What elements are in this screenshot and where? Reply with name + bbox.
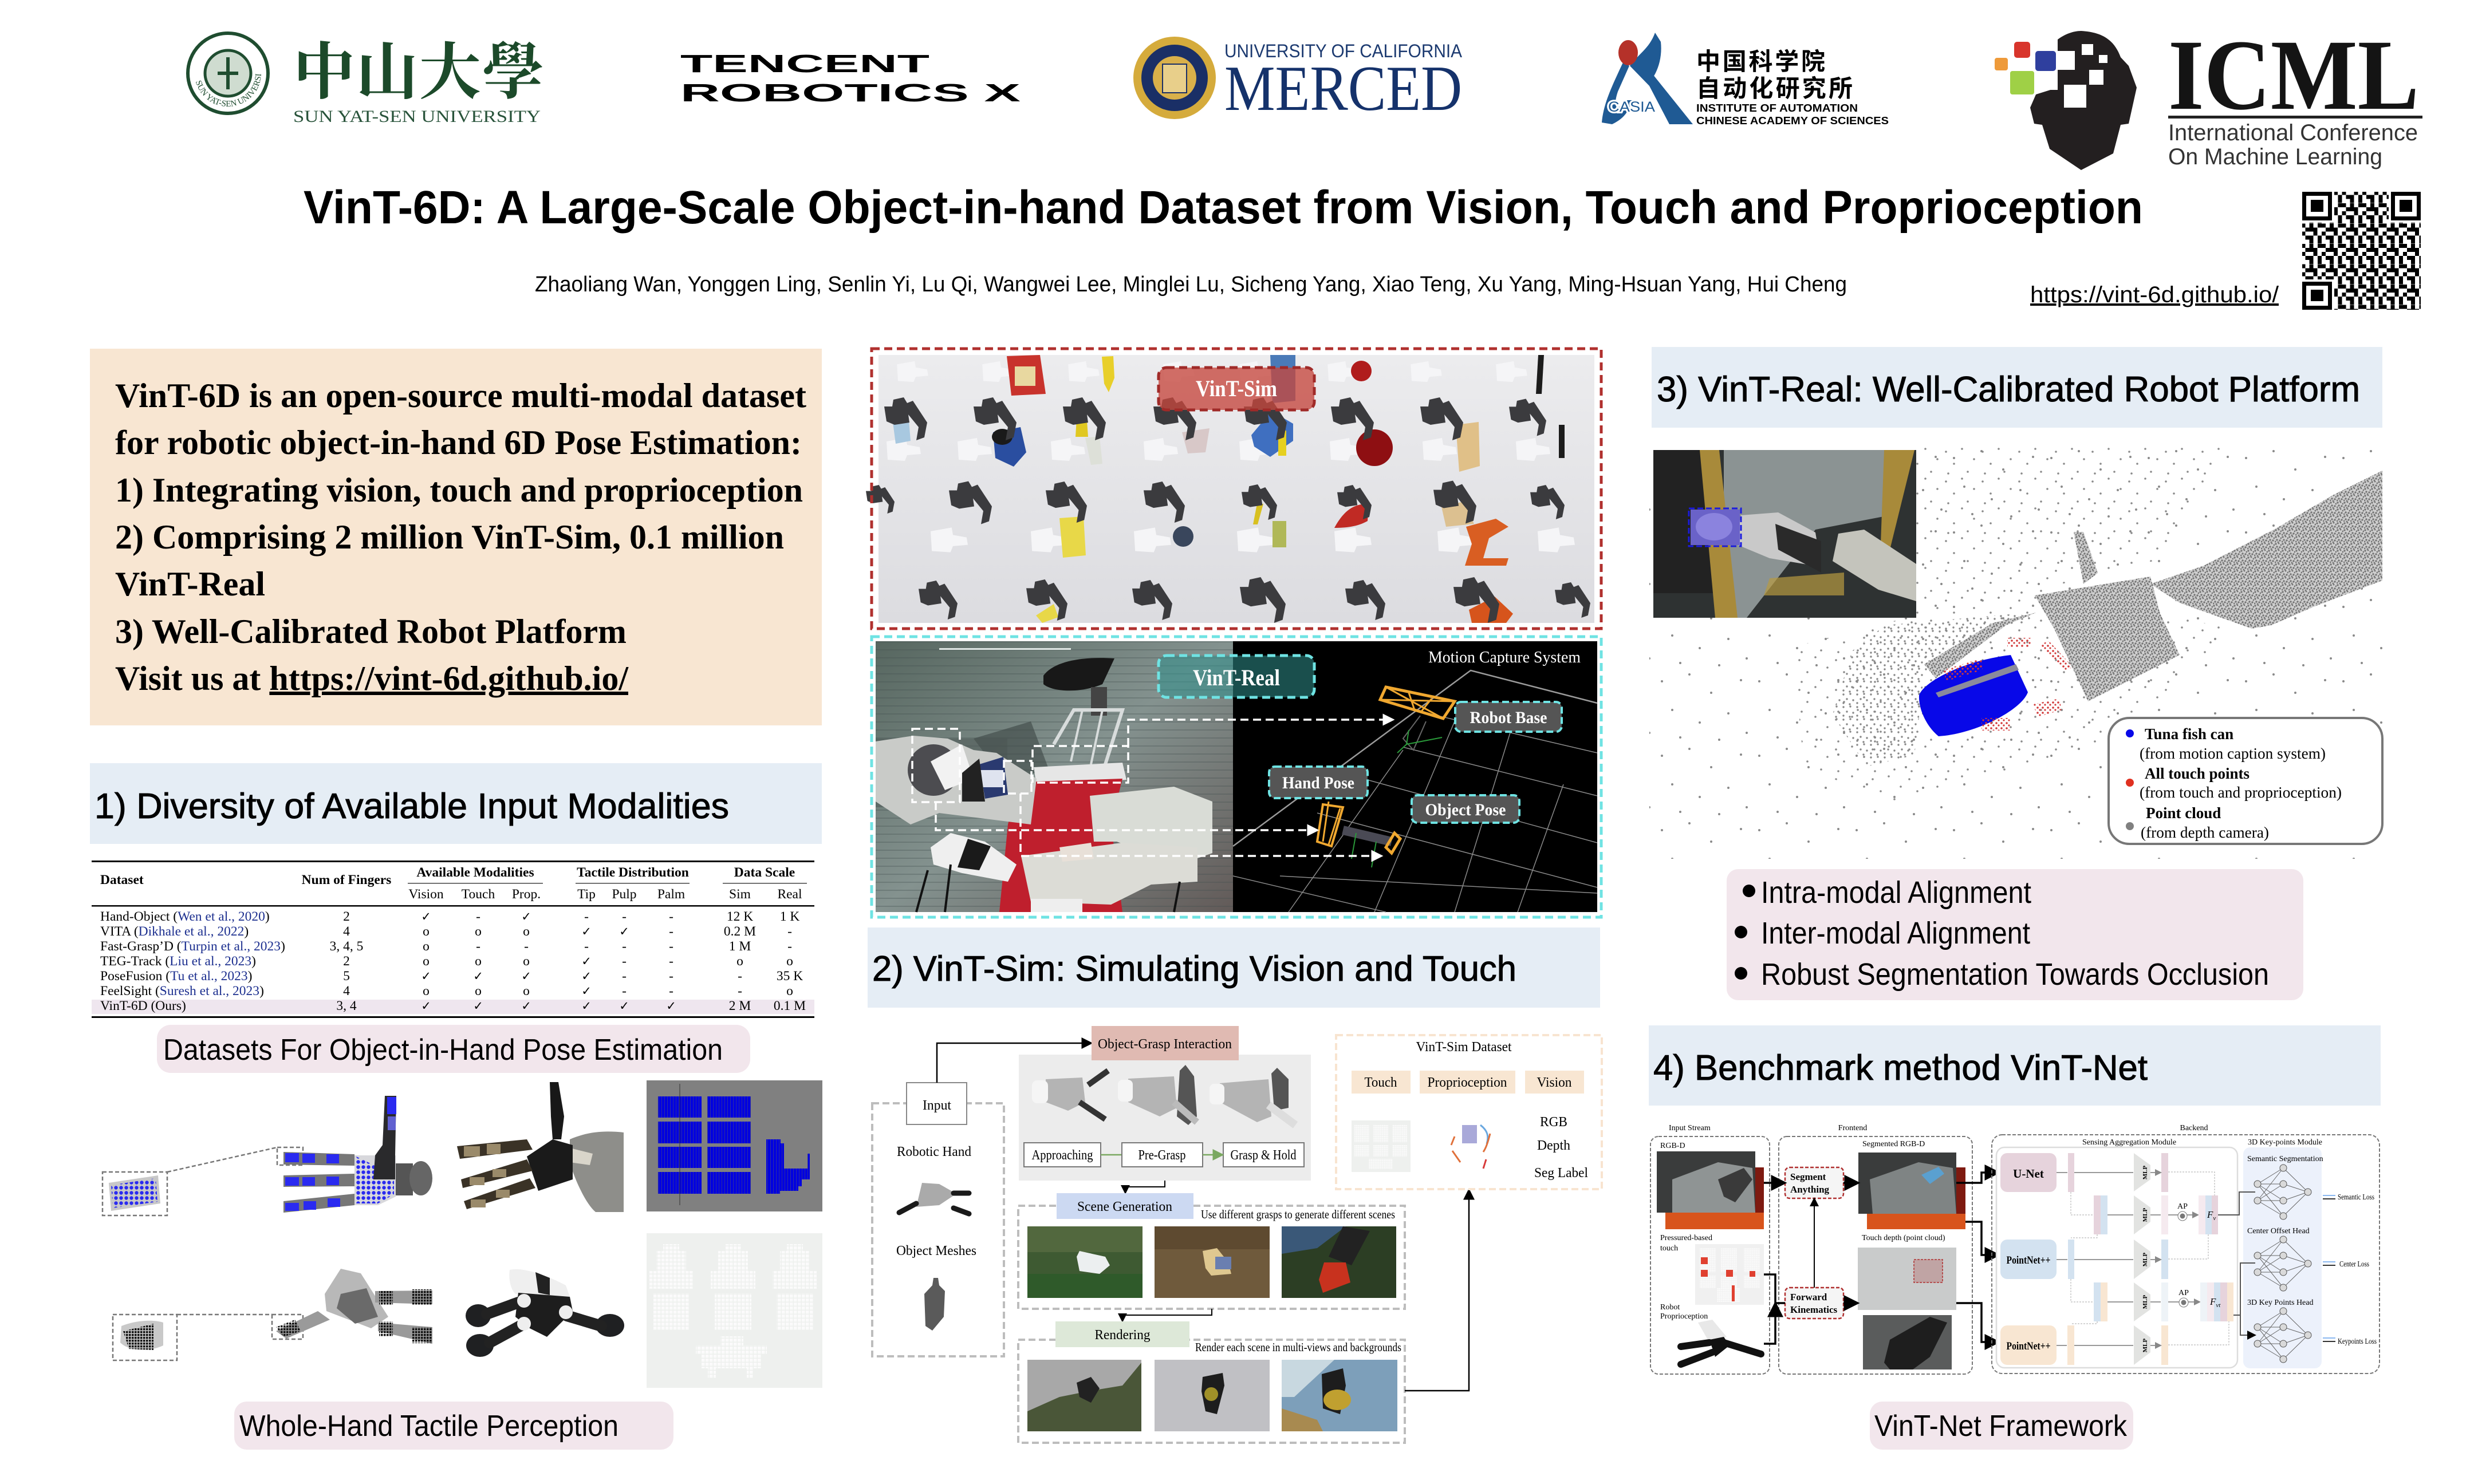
table: datasets comparison: 1 K: [780, 909, 799, 924]
backend: Sensing Aggregation Module: [2082, 1138, 2176, 1147]
table: datasets comparison: Vision: [408, 887, 444, 902]
backend: vt: [2216, 1302, 2221, 1309]
logo: CASIA: [1602, 33, 1889, 127]
table: datasets comparison: TEG-Track (Liu et al., 2023): [100, 954, 256, 969]
callout: alignment bullets: [1727, 869, 2303, 1000]
table: datasets comparison: -: [787, 939, 792, 954]
backend: Center Offset Head: [2247, 1227, 2310, 1236]
diagram: rendering: Render each scene in multi-views and backgrounds: [1195, 1340, 1401, 1354]
panel: summary: VinT-6D is an open-source multi-modal dataset: [115, 377, 806, 415]
table: datasets comparison: 12 K: [727, 909, 753, 924]
label: hand pose: Hand Pose: [1282, 773, 1354, 792]
backend: AP: [2177, 1202, 2188, 1211]
diagram: scene generation: [1018, 1193, 1405, 1321]
photo: robot platform: [1653, 450, 1916, 618]
url: https://vint-6d.github.io/: [2030, 282, 2279, 307]
frontend: Anything: [1790, 1184, 1830, 1195]
panel: summary: for robotic object-in-hand 6D Pose Estimation:: [115, 424, 802, 461]
heading: section 2: 2) VinT-Sim: Simulating Vision and Touch: [872, 949, 1516, 989]
photo: cloudy tree render: [1027, 1360, 1141, 1431]
table: datasets comparison: Pulp: [612, 887, 637, 902]
backend: 3D Key-points Module: [2248, 1138, 2322, 1147]
panel: summary: 2) Comprising 2 million VinT-Sim, 0.1 million: [115, 518, 784, 556]
diagram: VinT-Sim dataset: Touch: [1364, 1075, 1397, 1090]
diagram: VinT-Sim dataset: Seg Label: [1534, 1166, 1588, 1181]
table: datasets comparison: 3, 4, 5: [330, 939, 363, 954]
diagram: object-grasp interaction: Approaching: [1032, 1148, 1093, 1163]
caption: datasets: Datasets For Object-in-Hand Pose Estimation: [163, 1033, 723, 1067]
legend: point cloud: All touch points: [2145, 765, 2250, 782]
tuna can points: [1919, 655, 2028, 736]
table: datasets comparison: -: [622, 969, 627, 984]
table: datasets comparison: -: [622, 984, 627, 998]
backend: Semantic Segmentation: [2247, 1155, 2323, 1163]
table: datasets comparison: -: [622, 939, 627, 954]
panel: summary: [90, 349, 822, 725]
diagram: VinT-Net framework: [1650, 1124, 2380, 1374]
table: datasets comparison: -: [622, 954, 627, 969]
table: datasets comparison: ✓: [581, 925, 592, 938]
table: datasets comparison: -: [476, 909, 480, 924]
table: datasets comparison: Data Scale: [734, 865, 795, 880]
diagram: object-grasp interaction: Pre-Grasp: [1138, 1148, 1185, 1163]
input stream: [1650, 1124, 1770, 1374]
table: datasets comparison: ✓: [581, 999, 592, 1013]
table: datasets comparison: ✓: [421, 999, 431, 1013]
logo: CASIA: 中国科学院: [1696, 48, 1825, 75]
frontend: Frontend: [1838, 1124, 1867, 1132]
panel: summary: 1) Integrating vision, touch and proprioception: [115, 471, 803, 509]
backend: 3D Key Points Head: [2247, 1298, 2314, 1307]
table: datasets comparison: Available Modalities: [416, 865, 534, 880]
diagram: VinT-Sim dataset: Vision: [1537, 1075, 1571, 1090]
frontend: Segment: [1790, 1171, 1826, 1182]
diagram: rendering: Rendering: [1095, 1328, 1150, 1343]
callout: alignment bullets: Intra-modal Alignment: [1761, 875, 2031, 910]
photo: tree scene: [1282, 1226, 1396, 1298]
table: datasets comparison: Dataset: [100, 873, 144, 887]
table: datasets comparison: Real: [777, 887, 802, 902]
logo: UC Merced: [1133, 37, 1463, 124]
table: datasets comparison: 2 M: [729, 998, 751, 1013]
label: VinT-Sim: [1159, 368, 1314, 410]
panel: summary: VinT-Real: [115, 565, 265, 603]
table: datasets comparison: -: [476, 939, 480, 954]
label: object pose: [1412, 795, 1519, 823]
table: datasets comparison: o: [475, 924, 482, 939]
logo: CASIA: 自动化研究所: [1696, 75, 1853, 102]
label: hand pose: [1269, 767, 1368, 798]
logo: Sun Yat-sen University: 中山大學: [293, 39, 544, 107]
input stream: Robot: [1660, 1303, 1680, 1312]
label: object pose: Object Pose: [1425, 800, 1506, 819]
authors: Zhaoliang Wan, Yonggen Ling, Senlin Yi, Lu Qi, Wangwei Lee, Minglei Lu, Sicheng Yang, Xiao Teng, Xu Yang, Ming-Hsuan Yang, Hui Cheng: [535, 273, 1847, 297]
diagram: object-grasp interaction: Object-Grasp Interaction: [1098, 1037, 1232, 1052]
table: datasets comparison: Hand-Object (Wen et al., 2020): [100, 909, 270, 924]
illustration: five finger hand photo: [457, 1082, 624, 1212]
photo: sky render: [1282, 1360, 1397, 1431]
table: datasets comparison: -: [584, 909, 589, 924]
backend: U-Net: [2013, 1167, 2044, 1181]
white dashed arrows: [912, 720, 1393, 856]
table: datasets comparison: o: [736, 954, 743, 969]
caption: whole-hand tactile: Whole-Hand Tactile Perception: [239, 1410, 618, 1443]
backend: F: [2210, 1296, 2216, 1307]
backend: F: [2207, 1209, 2213, 1220]
table: datasets comparison: Touch: [462, 887, 495, 902]
table: datasets comparison: -: [738, 984, 742, 998]
backend: Center Loss: [2339, 1260, 2369, 1269]
connecting arrows: [1764, 1173, 1999, 1344]
illustration: five finger hand with tactile pads: [103, 1096, 432, 1215]
logo: UC Merced: MERCED: [1224, 53, 1462, 124]
table: datasets comparison: ✓: [521, 910, 531, 923]
table: datasets comparison: Prop.: [512, 887, 541, 902]
photo: dirt scene: [1155, 1226, 1270, 1298]
input stream: Input Stream: [1669, 1124, 1711, 1132]
frontend: Segmented RGB-D: [1862, 1140, 1925, 1148]
chart: tactile sensor cell grid: [647, 1233, 822, 1388]
backend: v: [2213, 1215, 2216, 1222]
input stream: Pressured-based: [1660, 1234, 1712, 1242]
table: datasets comparison: Num of Fingers: [302, 873, 391, 887]
table: datasets comparison: ✓: [473, 969, 483, 983]
heading: section 1: 1) Diversity of Available Input Modalities: [94, 787, 729, 826]
table: datasets comparison: o: [786, 954, 793, 969]
chart: point cloud: [1649, 447, 2388, 859]
backend: [1992, 1124, 2380, 1374]
table: datasets comparison: [92, 861, 814, 1018]
input stream: Proprioception: [1660, 1312, 1708, 1321]
illustration: four finger hand photo: [466, 1269, 624, 1357]
table: datasets comparison: -: [524, 939, 529, 954]
diagram: scene generation: Scene Generation: [1077, 1199, 1172, 1214]
white robot hands: [887, 361, 1575, 552]
illustration: four finger hand with tactile skin: [113, 1269, 432, 1360]
table: datasets comparison: 1 M: [729, 939, 751, 954]
frontend: Forward: [1790, 1292, 1827, 1303]
table: datasets comparison: VinT-6D (Ours): [100, 998, 186, 1013]
logo: Tencent Robotics X: [680, 50, 1021, 107]
backend: Backend: [2180, 1124, 2208, 1132]
heading: section 4: 4) Benchmark method VinT-Net: [1653, 1048, 2148, 1088]
diagram: VinT-Sim dataset: RGB: [1540, 1115, 1567, 1130]
table: datasets comparison: o: [423, 954, 430, 969]
table: datasets comparison: o: [475, 984, 482, 998]
table: datasets comparison: 35 K: [777, 969, 803, 984]
table: datasets comparison: -: [787, 924, 792, 939]
table: datasets comparison: -: [669, 984, 673, 998]
frontend: Kinematics: [1790, 1304, 1838, 1315]
logo: Tencent Robotics X: TENCENT: [680, 50, 929, 78]
legend: point cloud: [2109, 718, 2382, 844]
table: datasets comparison: 4: [343, 984, 350, 998]
photo: robot arms: [876, 641, 1233, 912]
backend: MLP: [2142, 1295, 2149, 1309]
heading: section 1: [90, 763, 822, 844]
label: robot base: [1455, 702, 1562, 732]
table: datasets comparison: 2: [343, 909, 350, 924]
table: datasets comparison: 3, 4: [336, 998, 357, 1013]
logo: ICML: On Machine Learning: [2168, 144, 2382, 169]
backend: MLP: [2142, 1339, 2149, 1352]
border: VinT-Sim: [872, 349, 1601, 629]
table: datasets comparison: FeelSight (Suresh et al., 2023): [100, 984, 264, 998]
table: datasets comparison: ✓: [619, 999, 629, 1013]
label: VinT-Real: VinT-Real: [1193, 665, 1280, 690]
motion capture view: Motion Capture System: [1428, 648, 1581, 666]
table: datasets comparison: 2: [343, 954, 350, 969]
diagram: VinT-Sim dataset: VinT-Sim Dataset: [1416, 1040, 1512, 1055]
frontend: Touch depth (point cloud): [1862, 1234, 1945, 1242]
table: datasets comparison: PoseFusion (Tu et al., 2023): [100, 969, 252, 984]
table: datasets comparison: ✓: [521, 969, 531, 983]
backend: Semantic Loss: [2338, 1193, 2374, 1202]
table: datasets comparison: Sim: [729, 887, 751, 902]
caption: datasets: [157, 1025, 750, 1073]
border: VinT-Real: [872, 637, 1601, 917]
table: datasets comparison: o: [423, 939, 430, 954]
table: datasets comparison: Palm: [657, 887, 685, 902]
table: datasets comparison: o: [786, 984, 793, 998]
title: VinT-6D: A Large-Scale Object-in-hand Dataset from Vision, Touch and Proprioception: [304, 181, 2143, 234]
label: VinT-Sim: VinT-Sim: [1196, 376, 1277, 401]
diagram: input column: Input: [923, 1098, 951, 1113]
legend: point cloud: (from depth camera): [2141, 824, 2269, 841]
diagram: VinT-Sim dataset: Proprioception: [1427, 1075, 1507, 1090]
logo: CASIA: CASIA: [1608, 99, 1655, 115]
table: datasets comparison: 0.1 M: [774, 998, 806, 1013]
table: datasets comparison: -: [669, 969, 673, 984]
table: datasets comparison: -: [584, 939, 589, 954]
table: datasets comparison: o: [475, 954, 482, 969]
table: datasets comparison: -: [738, 969, 742, 984]
table: datasets comparison: 0.2 M: [724, 924, 756, 939]
table: datasets comparison: 5: [343, 969, 350, 984]
diagram: object-grasp interaction: Grasp & Hold: [1230, 1148, 1297, 1163]
table: datasets comparison: -: [669, 954, 673, 969]
table: datasets comparison: Tip: [577, 887, 596, 902]
logo: Tencent Robotics X: ROBOTICS X: [680, 79, 1021, 107]
backend: PointNet++: [2007, 1254, 2050, 1266]
heading: section 3: 3) VinT-Real: Well-Calibrated Robot Platform: [1657, 370, 2360, 409]
photo: grass scene: [1027, 1226, 1143, 1298]
table: datasets comparison: ✓: [421, 969, 431, 983]
legend: point cloud: Point cloud: [2146, 804, 2221, 822]
photo: cloudy render: [1155, 1360, 1270, 1431]
backend: AP: [2178, 1289, 2189, 1297]
heading: section 2: [868, 928, 1600, 1008]
label: VinT-Real: [1159, 656, 1314, 697]
input stream: RGB-D: [1660, 1142, 1685, 1150]
table: datasets comparison: o: [523, 924, 530, 939]
table: datasets comparison: -: [669, 939, 673, 954]
motion capture view: [1233, 641, 1597, 912]
backend: PointNet++: [2007, 1340, 2050, 1352]
table: datasets comparison: ✓: [581, 954, 592, 968]
table: datasets comparison: o: [523, 984, 530, 998]
logo: Sun Yat-sen University: [186, 31, 544, 126]
table: datasets comparison: o: [423, 984, 430, 998]
backend: MLP: [2142, 1253, 2149, 1266]
table: datasets comparison: -: [669, 924, 673, 939]
caption: whole-hand tactile: [234, 1402, 673, 1450]
panel: summary: 3) Well-Calibrated Robot Platform: [115, 613, 627, 650]
logo: ICML: [1995, 19, 2422, 170]
logo: Sun Yat-sen University: SUN YAT-SEN UNIVERSITY: [293, 107, 541, 126]
table: datasets comparison: ✓: [666, 999, 676, 1013]
diagram: input column: Object Meshes: [896, 1244, 976, 1258]
table: datasets comparison: -: [669, 909, 673, 924]
backend: MLP: [2142, 1208, 2149, 1222]
diagram: object-grasp interaction: [1019, 1026, 1311, 1193]
table: datasets comparison: o: [523, 954, 530, 969]
input stream: touch: [1660, 1244, 1678, 1253]
legend: point cloud: Tuna fish can: [2145, 725, 2233, 743]
panel: summary: Visit us at https://vint-6d.github.io/: [115, 660, 629, 697]
QR code: [2300, 190, 2423, 312]
heading: section 3: [1652, 347, 2382, 428]
logo: ICML: International Conference: [2168, 120, 2418, 145]
logo: CASIA: CHINESE ACADEMY OF SCIENCES: [1696, 115, 1889, 127]
callout: alignment bullets: Robust Segmentation Towards Occlusion: [1761, 957, 2269, 992]
logo: ICML: ICML: [2168, 19, 2419, 131]
logo: UC Merced: UNIVERSITY OF CALIFORNIA: [1224, 41, 1463, 61]
table: datasets comparison: Fast-Grasp’D (Turpin et al., 2023): [100, 939, 285, 954]
diagram: scene generation: Use different grasps to generate different scenes: [1201, 1207, 1395, 1221]
diagram: input column: [872, 1043, 1092, 1356]
legend: point cloud: (from motion caption system): [2140, 745, 2326, 762]
diagram: rendering: [1018, 1190, 1469, 1443]
colored objects: [892, 355, 1565, 623]
table: datasets comparison: ✓: [473, 999, 483, 1013]
caption: VinT-Net framework: VinT-Net Framework: [1874, 1410, 2128, 1443]
panel: VinT-Real image: [872, 637, 1601, 917]
table: datasets comparison: ✓: [421, 910, 431, 923]
panel: VinT-Sim image: [866, 349, 1601, 629]
logo: CASIA: INSTITUTE OF AUTOMATION: [1696, 102, 1858, 114]
backend: MLP: [2142, 1166, 2149, 1179]
table: datasets comparison: Tactile Distribution: [577, 865, 689, 880]
table: datasets comparison: ✓: [581, 969, 592, 983]
heading: section 4: [1649, 1025, 2381, 1106]
backend: Keypoints Loss: [2338, 1337, 2377, 1346]
table: datasets comparison: ✓: [521, 999, 531, 1013]
diagram: VinT-Sim dataset: [1336, 1035, 1602, 1189]
diagram: input column: Robotic Hand: [897, 1144, 971, 1159]
caption: VinT-Net framework: [1870, 1402, 2133, 1450]
table: datasets comparison: -: [622, 909, 627, 924]
dark grippers: [866, 397, 1590, 623]
frontend: [1779, 1124, 1972, 1374]
table: datasets comparison: o: [423, 924, 430, 939]
callout: alignment bullets: Inter-modal Alignment: [1761, 916, 2030, 950]
table: datasets comparison: ✓: [581, 984, 592, 998]
chart: tactile sensor layout: [647, 1080, 822, 1211]
label: robot base: Robot Base: [1470, 708, 1547, 727]
legend: point cloud: (from touch and proprioception): [2140, 784, 2342, 801]
table: datasets comparison: VITA (Dikhale et al., 2022): [100, 924, 249, 939]
diagram: VinT-Sim dataset: Depth: [1537, 1138, 1570, 1153]
table: datasets comparison: ✓: [619, 925, 629, 938]
table: datasets comparison: 4: [343, 924, 350, 939]
